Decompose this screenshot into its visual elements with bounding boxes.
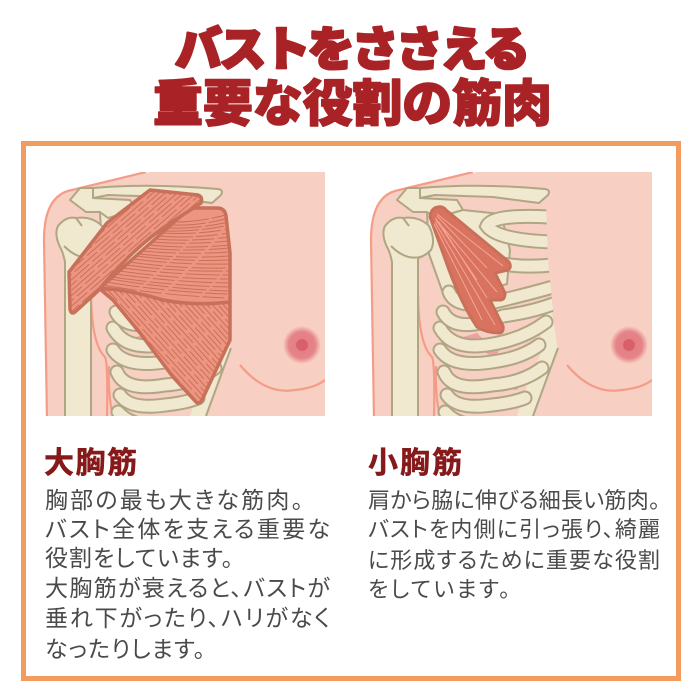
title: 重要な役割の筋肉 <box>153 76 552 132</box>
muscle: lower sternal fibres <box>100 289 230 403</box>
body copy <box>45 487 330 662</box>
title <box>153 23 552 132</box>
muscle: clavicular fibres <box>69 190 202 313</box>
muscle: pectoralis minor <box>430 207 510 333</box>
illustration: pectoralis major <box>44 172 330 425</box>
body copy: をしています。 <box>368 577 510 602</box>
body copy: バストを内側に引っ張り、綺麗 <box>368 517 660 542</box>
body copy: 胸部の最も大きな筋肉。 <box>45 487 303 513</box>
body copy <box>368 488 660 602</box>
body copy: 大胸筋が衰えると、バストが <box>45 575 330 601</box>
muscle: middle sternal fibres <box>100 208 230 304</box>
body copy: 肩から脇に伸びる細長い筋肉。 <box>368 488 660 513</box>
body copy: 役割をしています。 <box>45 545 233 571</box>
body copy: バスト全体を支える重要な <box>45 516 330 542</box>
heading: 小胸筋 <box>368 447 462 480</box>
body copy: 垂れ下がったり、ハリがなく <box>45 605 330 631</box>
body copy: に形成するために重要な役割 <box>368 548 660 573</box>
text block: pectoralis minor <box>368 447 660 602</box>
heading: 大胸筋 <box>44 447 137 480</box>
illustration: pectoralis minor <box>371 172 657 425</box>
panel frame <box>24 144 678 678</box>
text block: pectoralis major <box>44 447 330 662</box>
body copy: なったりします。 <box>45 636 205 662</box>
title: バストをささえる <box>175 23 530 76</box>
